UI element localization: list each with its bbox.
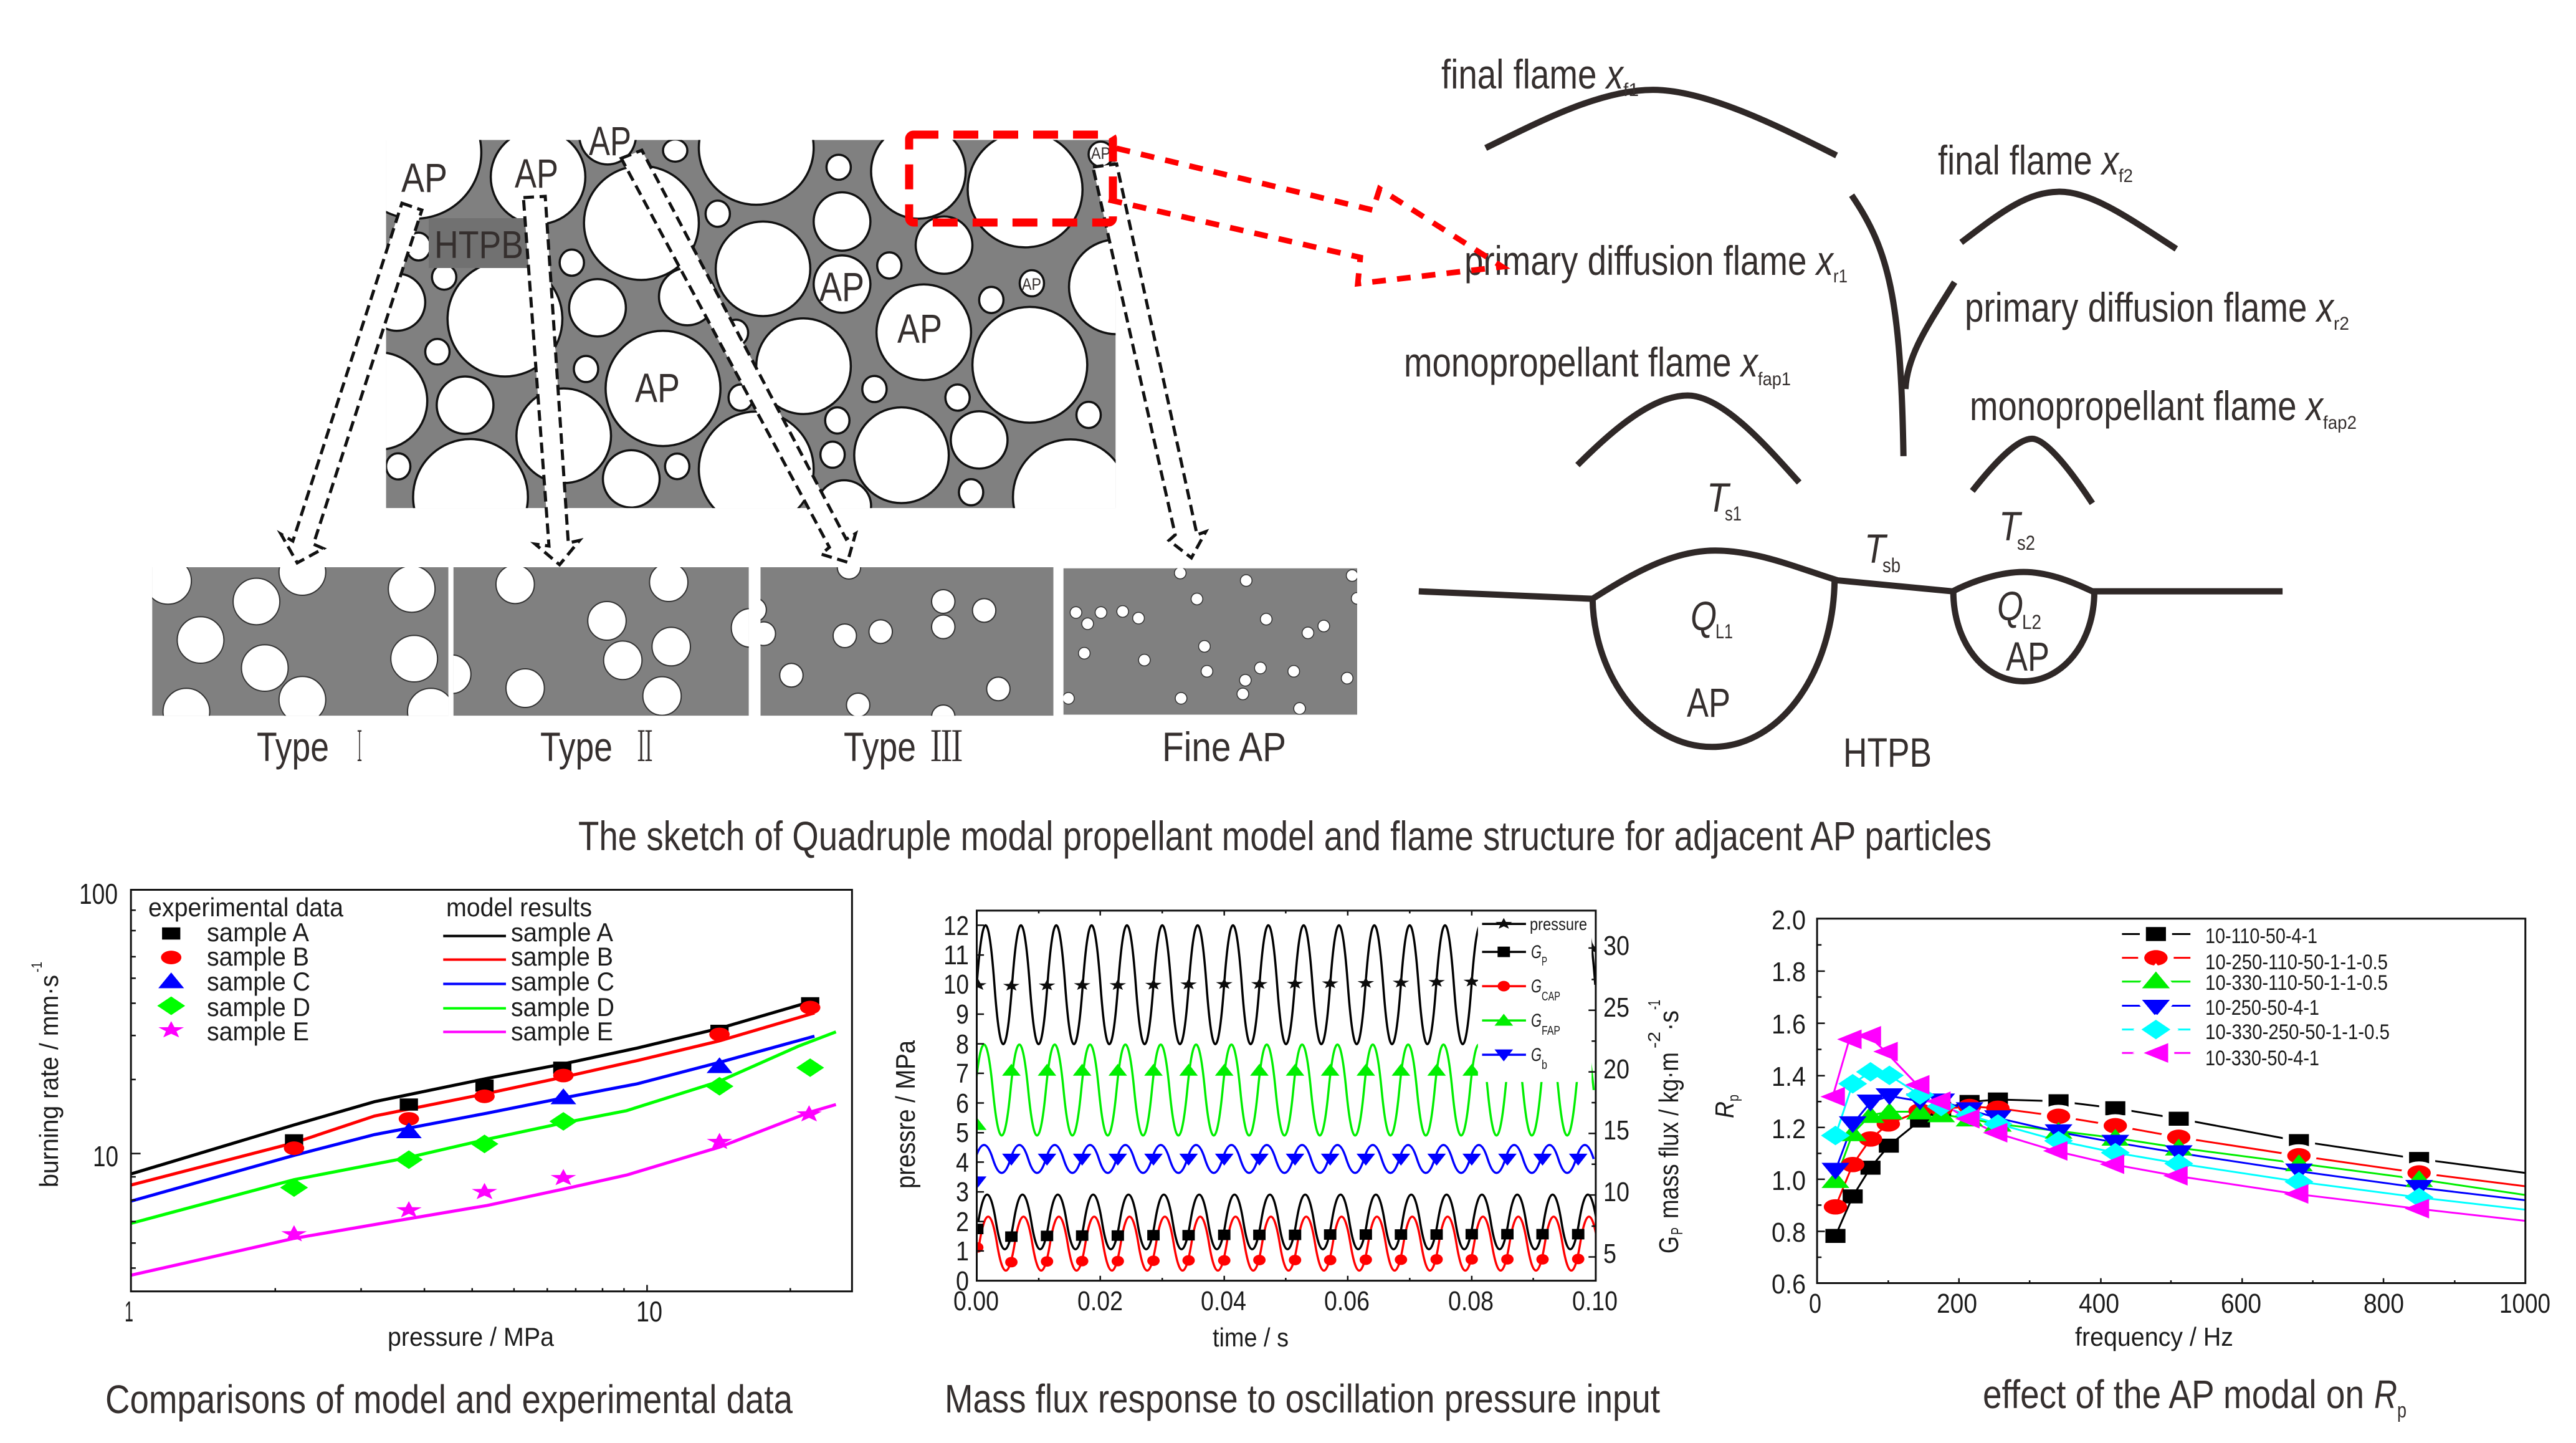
bottom axis tick labels: 0.02 xyxy=(1077,1286,1123,1316)
chart: mass flux response xyxy=(890,911,1686,1352)
red dashed zoom arrow xyxy=(1107,148,1502,284)
caption: effect on Rp: R xyxy=(2374,1372,2397,1417)
arrow: to Fine AP xyxy=(1093,164,1206,558)
legend text: sample B xyxy=(511,942,613,971)
right axis tick labels: 25 xyxy=(1603,992,1629,1023)
y tick labels: 1.6 xyxy=(1772,1009,1806,1040)
legend text: sample A xyxy=(207,918,309,947)
x tick labels: 600 xyxy=(2221,1288,2261,1319)
right y axis label: mass flux / kg·m xyxy=(1654,1052,1684,1219)
legend labels: 10-250-50-4-1 xyxy=(2205,996,2319,1020)
x tick labels: 1000 xyxy=(2499,1288,2550,1319)
right y axis label: ·s xyxy=(1654,1010,1684,1031)
y tick labels: 1.0 xyxy=(1772,1166,1806,1196)
right y axis label: P xyxy=(1667,1227,1686,1235)
bottom axis tick labels: 0.10 xyxy=(1572,1286,1618,1316)
AP particle labels: AP xyxy=(897,305,942,352)
right y axis label: G xyxy=(1654,1236,1684,1254)
arrow: to Type III xyxy=(621,150,856,562)
y tick labels: 0.8 xyxy=(1772,1217,1806,1248)
panel: flame structure xyxy=(1404,51,2357,775)
chart: effect of AP modal on Rp xyxy=(1710,905,2550,1351)
left axis tick labels: 0 xyxy=(956,1266,969,1297)
caption: mass flux: Mass flux response to oscillation pressure input xyxy=(945,1376,1660,1421)
legend text: sample C xyxy=(207,967,310,996)
left axis tick labels: 5 xyxy=(956,1118,969,1148)
left axis tick labels: 9 xyxy=(956,999,969,1030)
AP particle labels: AP xyxy=(589,118,631,164)
panel: Fine AP particles xyxy=(1062,567,1363,715)
y tick labels: 1.4 xyxy=(1772,1062,1806,1092)
label: final flame 1: f1 xyxy=(1623,80,1639,100)
legend text xyxy=(148,893,614,1046)
arrow: to Type II xyxy=(523,196,580,565)
label: heat terms and materials: HTPB xyxy=(1843,729,1932,775)
arrow: to Type I xyxy=(281,203,422,563)
flame curves and burning surface xyxy=(1419,90,2283,747)
bottom axis tick labels: 0.04 xyxy=(1201,1286,1246,1316)
main caption: The sketch of Quadruple modal propellant model and flame structure for adjacent AP particles xyxy=(578,813,1992,859)
y axis label: burning rate / mm·s xyxy=(34,975,64,1187)
left y axis label: pressre / MPa xyxy=(890,1040,921,1189)
type labels xyxy=(257,724,1286,770)
label: heat terms and materials xyxy=(1687,583,2049,775)
left axis tick labels: 12 xyxy=(943,911,969,941)
label: final flame 1: final flame x xyxy=(1441,51,1624,97)
label: monopropellant flame 2: fap2 xyxy=(2323,413,2357,433)
x tick labels xyxy=(1809,1288,2550,1319)
plot area, waves and markers xyxy=(968,911,1600,1281)
legend labels: FAP xyxy=(1542,1024,1560,1038)
right y axis label: -1 xyxy=(1644,1000,1664,1010)
legend labels: 10-330-110-50-1-1-0.5 xyxy=(2205,971,2388,995)
y tick labels: 0.6 xyxy=(1772,1269,1806,1300)
panel: propellant model xyxy=(386,127,1115,509)
label: primary diffusion flame 1: r1 xyxy=(1833,266,1848,287)
legend text: sample B xyxy=(207,942,309,971)
legend labels: G xyxy=(1531,1045,1542,1065)
legend labels xyxy=(2205,924,2390,1070)
caption: effect on Rp: p xyxy=(2397,1399,2407,1422)
right axis tick labels: 5 xyxy=(1603,1239,1616,1269)
type labels: Ⅱ xyxy=(634,725,656,770)
label: primary diffusion flame 1: primary diffusion flame x xyxy=(1464,237,1834,284)
panel: Type III particles xyxy=(760,567,1053,716)
caption: comparisons: Comparisons of model and experimental data xyxy=(105,1377,793,1422)
type labels: Ⅰ xyxy=(354,725,365,770)
label: heat terms and materials: Q xyxy=(1691,593,1717,639)
AP particle labels: AP xyxy=(1091,144,1110,163)
left axis tick labels: 4 xyxy=(956,1148,969,1178)
label: surface temperatures: s1 xyxy=(1725,502,1742,525)
plot area, series and markers xyxy=(1817,919,2526,1283)
plot area, curves and data points xyxy=(131,890,852,1292)
legend labels: G xyxy=(1531,976,1542,997)
legend text: experimental data xyxy=(148,893,344,922)
type labels: Type xyxy=(844,724,916,770)
label: heat terms and materials: AP xyxy=(2006,633,2049,679)
label: monopropellant flame 2: monopropellant flame x xyxy=(1970,383,2324,429)
legend labels: b xyxy=(1542,1058,1547,1072)
AP particle labels: AP xyxy=(401,155,447,201)
right axis tick labels: 20 xyxy=(1603,1054,1629,1085)
x tick labels: 0 xyxy=(1809,1288,1821,1319)
label: monopropellant flame 1: fap1 xyxy=(1758,369,1791,390)
axis tick labels: 10 xyxy=(636,1295,662,1328)
axis tick labels: 100 xyxy=(79,878,118,910)
type labels: Type xyxy=(257,724,329,770)
label: surface temperatures: T xyxy=(1999,503,2023,549)
right y axis label xyxy=(1644,1000,1686,1254)
legend text: sample E xyxy=(511,1017,613,1046)
legend labels: 10-330-250-50-1-1-0.5 xyxy=(2205,1020,2390,1044)
AP particle labels: AP xyxy=(635,365,680,411)
legend text: model results xyxy=(446,893,592,922)
legend labels: 10-250-110-50-1-1-0.5 xyxy=(2205,951,2388,974)
left axis tick labels: 11 xyxy=(943,940,969,971)
AP particle labels: AP xyxy=(1022,275,1041,294)
legend text: sample C xyxy=(511,967,614,996)
left axis tick labels: 7 xyxy=(956,1058,969,1089)
label: heat terms and materials: AP xyxy=(1687,679,1730,726)
legend labels: CAP xyxy=(1542,990,1560,1004)
type labels: Ⅲ xyxy=(930,725,963,770)
axis tick labels xyxy=(79,878,662,1328)
x axis label: frequency / Hz xyxy=(2075,1322,2233,1351)
grey matrix with AP particles xyxy=(386,140,1115,509)
left axis tick labels: 10 xyxy=(943,969,969,1000)
label: primary diffusion flame 2: r2 xyxy=(2334,314,2349,334)
label: heat terms and materials: L2 xyxy=(2022,611,2041,633)
x tick labels: 200 xyxy=(1937,1288,1977,1319)
right axis tick labels xyxy=(1603,931,1629,1269)
HTPB label box: HTPB xyxy=(434,224,523,267)
left axis tick labels: 3 xyxy=(956,1177,969,1207)
axis tick labels: 10 xyxy=(93,1140,118,1172)
label: monopropellant flame 1: monopropellant flame x xyxy=(1404,339,1759,385)
y axis label: -1 xyxy=(29,962,45,972)
panel: Type II particles xyxy=(454,567,749,716)
label: heat terms and materials: Q xyxy=(1997,583,2023,629)
caption: effect on Rp: effect of the AP modal on xyxy=(1983,1372,2364,1417)
label: surface temperatures: s2 xyxy=(2017,532,2035,554)
legend labels: 10-110-50-4-1 xyxy=(2205,924,2317,948)
panel: Type I particles xyxy=(152,567,449,716)
y axis label: p xyxy=(1725,1095,1742,1101)
bottom axis tick labels: 0.00 xyxy=(953,1286,999,1316)
left axis tick labels: 6 xyxy=(956,1088,969,1119)
type labels: Type xyxy=(540,724,613,770)
right axis tick labels: 10 xyxy=(1603,1177,1629,1207)
AP particle labels xyxy=(401,118,1110,411)
y tick labels: 2.0 xyxy=(1772,905,1806,936)
bottom axis tick labels: 0.06 xyxy=(1324,1286,1370,1316)
label: final flame 2: final flame x xyxy=(1938,137,2120,183)
left axis tick labels: 8 xyxy=(956,1029,969,1060)
label: surface temperatures xyxy=(1707,474,2035,577)
y axis label: R xyxy=(1710,1101,1739,1118)
label: surface temperatures: T xyxy=(1864,525,1888,572)
y tick labels: 1.2 xyxy=(1772,1114,1806,1144)
left axis tick labels: 1 xyxy=(956,1236,969,1267)
label: final flame 2: f2 xyxy=(2119,166,2133,186)
legend labels: 10-330-50-4-1 xyxy=(2205,1047,2319,1070)
axis tick labels: 1 xyxy=(125,1295,133,1328)
right axis tick labels: 15 xyxy=(1603,1115,1629,1146)
legend text: sample E xyxy=(207,1017,309,1046)
red dashed selection rectangle xyxy=(909,135,1113,223)
y tick labels: 1.8 xyxy=(1772,957,1806,987)
label: heat terms and materials: L1 xyxy=(1715,620,1733,643)
left axis tick labels: 2 xyxy=(956,1207,969,1237)
legend text: sample D xyxy=(511,992,614,1022)
bottom axis tick labels: 0.08 xyxy=(1448,1286,1494,1316)
right axis tick labels: 30 xyxy=(1603,931,1629,961)
AP particle labels: AP xyxy=(819,264,864,310)
legend text: sample D xyxy=(207,992,310,1022)
x axis label: time / s xyxy=(1213,1323,1289,1352)
label: surface temperatures: sb xyxy=(1882,554,1901,577)
right y axis label: -2 xyxy=(1644,1032,1664,1048)
legend labels: G xyxy=(1531,942,1542,962)
y tick labels xyxy=(1772,905,1806,1300)
x axis label: pressure / MPa xyxy=(388,1322,555,1351)
legend labels: G xyxy=(1531,1010,1542,1031)
legend labels xyxy=(1530,914,1587,1072)
type labels: Fine AP xyxy=(1162,724,1286,770)
bottom axis tick labels xyxy=(953,1286,1618,1316)
chart: burning rate comparison xyxy=(29,878,852,1351)
AP particle labels: AP xyxy=(515,150,558,196)
x tick labels: 800 xyxy=(2364,1288,2404,1319)
legend text: sample A xyxy=(511,918,613,947)
x tick labels: 400 xyxy=(2079,1288,2119,1319)
label: primary diffusion flame 2: primary diffusion flame x xyxy=(1965,284,2335,330)
legend labels: pressure xyxy=(1530,914,1587,934)
left axis tick labels xyxy=(943,911,969,1297)
legend labels: P xyxy=(1542,955,1547,969)
label: surface temperatures: T xyxy=(1707,474,1731,520)
